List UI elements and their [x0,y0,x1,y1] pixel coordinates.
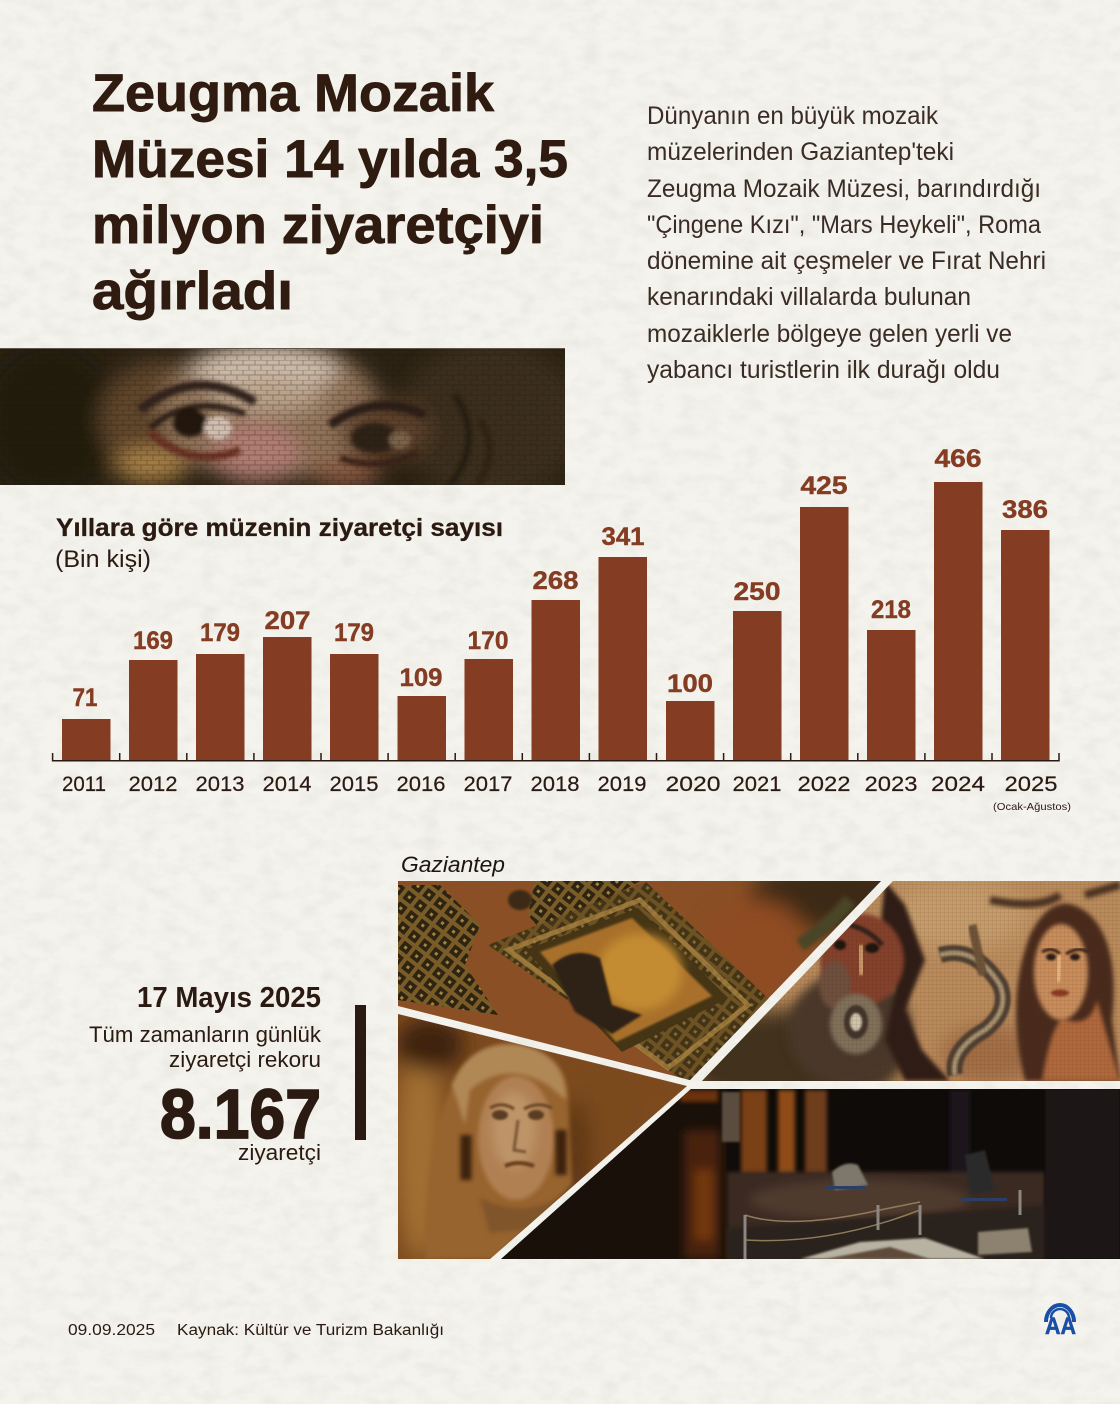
year labels [62,772,1058,796]
image: mosaic eyes banner [0,348,565,485]
year labels: 2014 [262,772,312,796]
bar values: 109 [400,664,442,692]
year labels: 2024 [931,772,985,796]
year labels: 2016 [396,772,446,796]
intro text block [647,102,1046,384]
bar values: 100 [667,670,713,698]
note under 2025: (Ocak-Ağustos) [993,801,1071,813]
bar values: 207 [264,607,310,635]
record description: Tüm zamanların günlük [89,1022,322,1047]
caption: Gaziantep: Gaziantep [401,852,505,877]
callout: daily visitor record [89,982,322,1165]
year labels: 2013 [196,772,245,796]
footer: date and source: Kaynak: Kültür ve Turizm Bakanlığı [177,1322,444,1339]
year labels: 2015 [330,772,379,796]
record date: 17 Mayıs 2025 [137,982,321,1014]
footer: date and source: 09.09.2025 [68,1322,155,1339]
year labels: 2017 [464,772,512,796]
bar values: 179 [334,619,374,647]
bar values: 71 [72,684,98,712]
title: ağırladı [92,262,293,321]
title: Müzesi 14 yılda 3,5 [92,130,568,189]
bar values: 169 [133,627,173,655]
intro text block: müzelerinden Gaziantep'teki [647,138,954,166]
record number: 8.167 [160,1075,321,1153]
icon: AA logo: AA [1045,1313,1076,1340]
footer: date and source [68,1322,444,1339]
title: milyon ziyaretçiyi [92,196,544,255]
photo: carved stone head [396,1010,698,1260]
bar values: 170 [468,627,508,655]
bars [62,482,1050,761]
year labels: 2011 [62,772,106,796]
photo: museum interior with restorers [495,1089,1120,1259]
intro text block: yabancı turistlerin ilk durağı oldu [647,356,1000,384]
panel: bar chart of yearly visitors [53,445,1071,813]
axis [53,753,1059,761]
year labels: 2019 [598,772,646,796]
chart unit: (Bin kişi) [55,546,151,573]
bar values: 268 [532,567,579,595]
year labels: 2012 [128,772,178,796]
year labels: 2022 [798,772,850,796]
intro text block: "Çingene Kızı", "Mars Heykeli", Roma [647,211,1041,239]
chart heading: Yıllara göre müzenin ziyaretçi sayısı [56,514,503,542]
bar values: 218 [871,596,911,624]
intro text block: mozaiklerle bölgeye gelen yerli ve [647,320,1012,348]
bar values: 250 [734,578,780,606]
bar values: 179 [200,619,240,647]
photo: geometric floor mosaic [398,881,881,1080]
bar values: 425 [800,472,848,500]
year labels: 2025 [1004,772,1058,796]
intro text block: dönemine ait çeşmeler ve Fırat Nehri [647,247,1046,275]
vertical bar accent [355,1005,366,1140]
title: Zeugma Mozaik [92,64,495,123]
record description [89,1022,322,1072]
year labels: 2020 [666,772,721,796]
intro text block: Dünyanın en büyük mozaik [647,102,938,130]
bar values: 386 [1002,496,1048,524]
intro text block: kenarındaki villalarda bulunan [647,283,971,311]
bar values: 466 [934,445,982,473]
title [92,64,568,321]
image collage [396,859,1120,1260]
record description: ziyaretçi rekoru [169,1047,321,1072]
intro text block: Zeugma Mozaik Müzesi, barındırdığı [647,175,1041,203]
photo: Oceanus and Tethys mosaic [702,881,1120,1081]
year labels: 2018 [530,772,580,796]
year labels: 2021 [732,772,782,796]
record unit: ziyaretçi [238,1140,321,1165]
year labels: 2023 [864,772,918,796]
bar values [72,445,1048,712]
bar values: 341 [602,523,645,551]
